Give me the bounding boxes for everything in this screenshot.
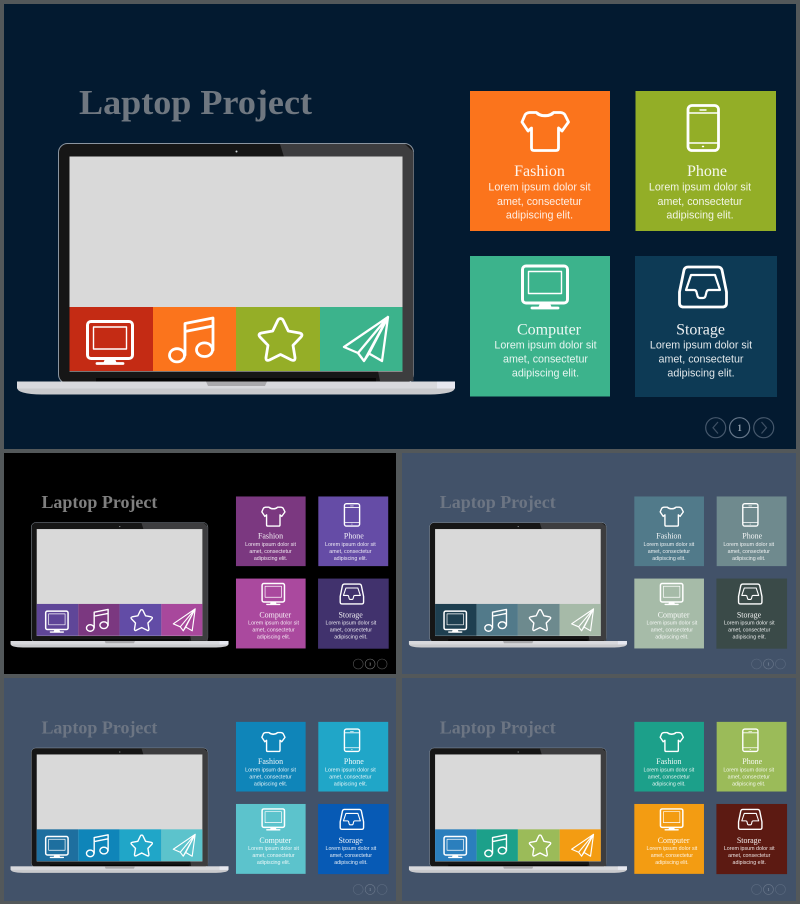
card: Phone: Phone xyxy=(742,532,763,541)
card: Fashion: Lorem ipsum dolor sit xyxy=(488,182,591,194)
panel: blue theme slide xyxy=(4,678,396,901)
card: Storage: amet, consectetur xyxy=(330,628,372,634)
card: Storage: adipiscing elit. xyxy=(733,860,766,866)
card: Computer: amet, consectetur xyxy=(252,628,295,634)
title: Laptop Project xyxy=(440,492,556,512)
card: Storage: adipiscing elit. xyxy=(334,634,368,640)
card: Storage: Storage xyxy=(339,611,363,620)
card: Fashion: adipiscing elit. xyxy=(652,781,686,787)
card: Phone: Phone xyxy=(742,757,763,766)
card: Computer: amet, consectetur xyxy=(651,853,693,859)
card: Phone: Phone xyxy=(687,163,727,180)
card: Computer: Computer xyxy=(658,836,690,845)
pagination xyxy=(752,659,785,669)
panel: purple theme slide xyxy=(4,453,396,674)
card: Phone: Lorem ipsum dolor sit xyxy=(649,182,751,194)
card: Storage: Lorem ipsum dolor sit xyxy=(325,846,377,852)
laptop with icon strip xyxy=(11,523,229,647)
card: Storage: Lorem ipsum dolor sit xyxy=(325,620,377,626)
card: Fashion: adipiscing elit. xyxy=(254,556,287,562)
card: Phone: amet, consectetur xyxy=(728,549,770,555)
card: Computer: Computer xyxy=(658,611,690,620)
card: Fashion xyxy=(470,91,610,231)
card: Computer: Lorem ipsum dolor sit xyxy=(494,339,597,351)
card: Computer: Computer xyxy=(517,322,582,338)
card: Computer: Computer xyxy=(259,611,292,620)
card: Storage: Storage xyxy=(737,611,762,620)
card: Storage: Lorem ipsum dolor sit xyxy=(724,846,775,852)
card: Fashion: Lorem ipsum dolor sit xyxy=(644,767,695,773)
card: Phone: adipiscing elit. xyxy=(334,556,367,562)
card: Storage: Lorem ipsum dolor sit xyxy=(724,620,775,626)
card: Phone: amet, consectetur xyxy=(728,775,770,781)
card: Phone xyxy=(717,722,787,792)
card: Computer: Lorem ipsum dolor sit xyxy=(646,620,698,626)
card: Fashion: Fashion xyxy=(258,757,283,766)
card: Storage: adipiscing elit. xyxy=(667,367,735,379)
card: Phone xyxy=(636,91,776,231)
card: Phone: adipiscing elit. xyxy=(732,556,765,562)
card: Fashion xyxy=(634,722,704,792)
pagination xyxy=(353,884,387,894)
pagination: 1 xyxy=(767,662,770,667)
card: Phone: Lorem ipsum dolor sit xyxy=(723,542,775,548)
card: Storage: Lorem ipsum dolor sit xyxy=(650,339,752,351)
title: Laptop Project xyxy=(41,717,158,737)
pagination xyxy=(353,659,387,669)
laptop with icon strip xyxy=(409,523,627,647)
pagination xyxy=(752,884,785,894)
card: Computer: adipiscing elit. xyxy=(257,634,290,640)
card: Computer: Computer xyxy=(259,836,292,845)
card: Fashion: Fashion xyxy=(656,532,682,541)
card: Storage: amet, consectetur xyxy=(728,628,771,634)
title: Laptop Project xyxy=(440,717,556,737)
card: Storage xyxy=(716,579,787,649)
card: Fashion: Fashion xyxy=(656,757,682,766)
card: Fashion: Lorem ipsum dolor sit xyxy=(245,542,296,548)
card: Computer xyxy=(634,579,704,648)
card: Fashion xyxy=(634,496,704,566)
pagination: 1 xyxy=(369,887,371,892)
card: Fashion: Lorem ipsum dolor sit xyxy=(644,542,695,548)
card: Fashion: Lorem ipsum dolor sit xyxy=(245,767,296,773)
card: Phone: adipiscing elit. xyxy=(334,781,367,787)
laptop with icon strip xyxy=(409,748,627,873)
card: Computer xyxy=(634,804,704,874)
card: Phone: amet, consectetur xyxy=(658,196,743,208)
card: Phone: Lorem ipsum dolor sit xyxy=(325,542,376,548)
card: Fashion: Fashion xyxy=(514,163,565,180)
card: Fashion: adipiscing elit. xyxy=(506,210,573,222)
card: Computer: adipiscing elit. xyxy=(512,367,579,379)
card: Phone: Phone xyxy=(344,532,364,541)
card: Phone: Lorem ipsum dolor sit xyxy=(723,767,775,773)
card: Storage xyxy=(318,579,389,649)
title: Laptop Project xyxy=(41,492,158,512)
card: Storage: Storage xyxy=(737,836,762,845)
card: Phone: Phone xyxy=(344,757,364,766)
card: Computer: adipiscing elit. xyxy=(655,634,689,640)
card: Phone xyxy=(717,496,787,566)
card: Fashion: adipiscing elit. xyxy=(254,781,287,787)
card: Computer xyxy=(236,804,306,874)
panel: slate theme slide xyxy=(402,453,796,674)
card: Fashion: amet, consectetur xyxy=(648,549,690,555)
card: Storage: amet, consectetur xyxy=(728,853,771,859)
card: Phone: amet, consectetur xyxy=(329,549,372,555)
card: Phone xyxy=(318,722,388,792)
card: Storage: Storage xyxy=(339,836,363,845)
pagination xyxy=(706,418,774,438)
card: Storage: Storage xyxy=(676,322,725,338)
panel: main slide, navy theme xyxy=(4,4,796,449)
card: Computer: Lorem ipsum dolor sit xyxy=(248,846,299,852)
card: Fashion: adipiscing elit. xyxy=(652,556,686,562)
card: Phone xyxy=(318,496,388,566)
card: Fashion: amet, consectetur xyxy=(249,775,292,781)
card: Storage: amet, consectetur xyxy=(659,354,744,366)
card: Computer: amet, consectetur xyxy=(503,354,588,366)
card: Fashion xyxy=(236,722,306,792)
card: Phone: Lorem ipsum dolor sit xyxy=(325,767,376,773)
card: Computer: Lorem ipsum dolor sit xyxy=(248,620,299,626)
card: Fashion: amet, consectetur xyxy=(497,196,582,208)
pagination: 1 xyxy=(767,887,770,892)
card: Computer: adipiscing elit. xyxy=(655,860,689,866)
card: Storage: adipiscing elit. xyxy=(733,634,766,640)
card: Fashion xyxy=(236,496,306,566)
card: Computer: amet, consectetur xyxy=(651,628,693,634)
card: Phone: amet, consectetur xyxy=(329,775,372,781)
pagination: 1 xyxy=(369,662,371,667)
card: Fashion: Fashion xyxy=(258,532,283,541)
card: Storage: amet, consectetur xyxy=(330,853,372,859)
card: Storage: adipiscing elit. xyxy=(334,860,368,866)
card: Storage xyxy=(318,804,389,874)
card: Computer: Lorem ipsum dolor sit xyxy=(646,846,698,852)
card: Computer xyxy=(236,579,306,648)
card: Computer: amet, consectetur xyxy=(252,853,295,859)
card: Computer: adipiscing elit. xyxy=(257,860,290,866)
card: Fashion: amet, consectetur xyxy=(648,775,690,781)
card: Storage xyxy=(716,804,787,874)
laptop with icon strip xyxy=(17,144,455,394)
laptop with icon strip xyxy=(11,748,229,873)
pagination: 1 xyxy=(737,423,742,433)
card: Storage xyxy=(635,256,777,397)
panel: multicolor theme slide xyxy=(402,678,796,901)
card: Fashion: amet, consectetur xyxy=(249,549,292,555)
card: Phone: adipiscing elit. xyxy=(666,210,734,222)
card: Phone: adipiscing elit. xyxy=(732,781,765,787)
title: Laptop Project xyxy=(79,83,312,122)
card: Computer xyxy=(470,256,610,396)
